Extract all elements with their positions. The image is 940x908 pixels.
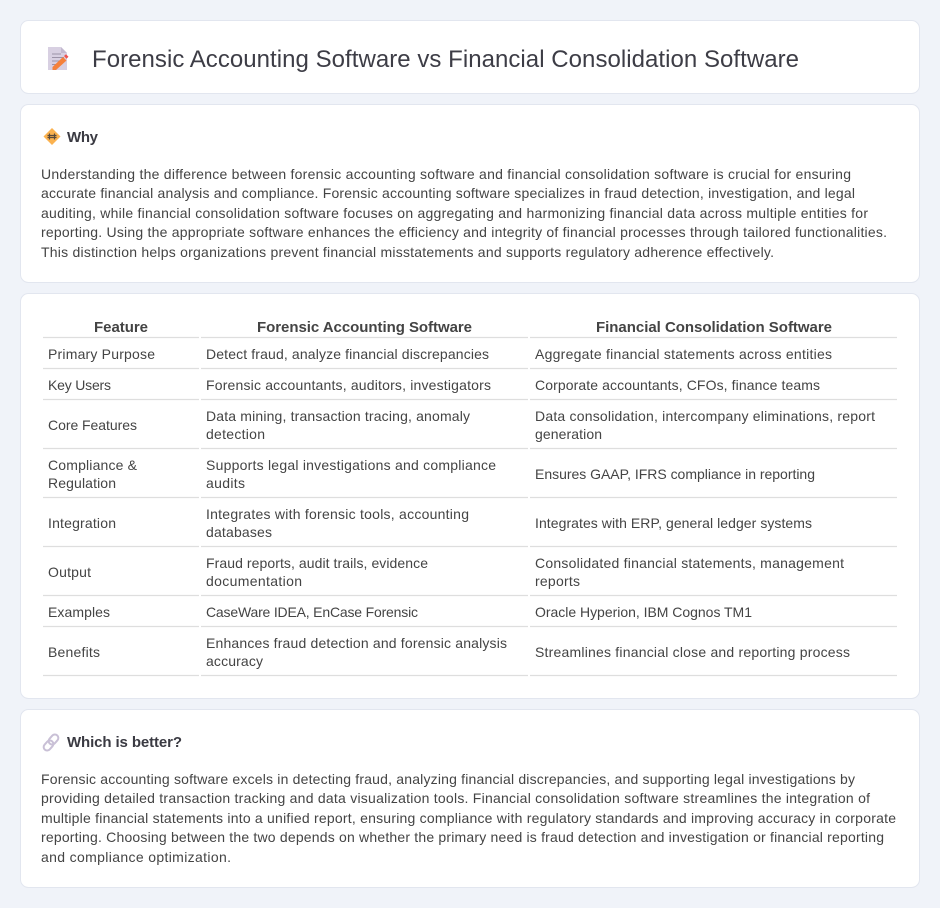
row: primary purpose: Primary Purpose [48, 346, 155, 362]
row: benefits [48, 635, 850, 669]
row: core features: Core Features [48, 417, 137, 433]
row: compliance and regulation [48, 457, 815, 491]
row: output: Output [48, 564, 91, 580]
row: primary purpose: Detect fraud, analyze financial discrepancies [206, 346, 489, 362]
row: examples: Examples [48, 604, 110, 620]
row: output: Fraud reports, audit trails, evidence [206, 555, 428, 571]
panel: comparison table [20, 294, 920, 698]
row: integration [48, 506, 812, 540]
title: Forensic Accounting Software vs Financial Consolidation Software [92, 46, 799, 73]
row: core features: generation [535, 426, 602, 442]
row: core features [48, 408, 875, 442]
table header [94, 319, 832, 336]
text block: which is better paragraph: multiple financial statements into a unified report, ensuring compliance with regulatory standards and improving accuracy in corporate [41, 810, 896, 826]
text block: which is better paragraph: Forensic accounting software excels in detecting fraud, analyzing financial discrepancies, and supporting legal investigations by [41, 771, 855, 787]
text block: why paragraph: accurate financial analysis and compliance. Forensic accounting software specializes in fraud detection, investigation, and legal [41, 185, 855, 201]
text block: why paragraph: This distinction helps organizations prevent financial misstatements and supports regulatory adherence effectively. [41, 244, 774, 260]
row: benefits: Benefits [48, 644, 100, 660]
table header: Feature [94, 319, 148, 336]
text block: which is better paragraph: providing detailed transaction tracking and data visualization tools. Financial consolidation software streamlines the integration of [41, 790, 870, 806]
table header: Forensic Accounting Software [257, 319, 472, 336]
row: benefits: Streamlines financial close and reporting process [535, 644, 850, 660]
row: integration: databases [206, 524, 272, 540]
panel: which is better [20, 710, 920, 888]
text block: why paragraph [41, 166, 887, 260]
row: primary purpose: Aggregate financial statements across entities [535, 346, 832, 362]
row: output: documentation [206, 573, 302, 589]
row: compliance and regulation: Ensures GAAP, IFRS compliance in reporting [535, 466, 815, 482]
row: core features: Data consolidation, intercompany eliminations, report [535, 408, 875, 424]
row: primary purpose [48, 346, 832, 362]
row: output [48, 555, 844, 589]
row: compliance and regulation: Regulation [48, 475, 116, 491]
row: compliance and regulation: Supports legal investigations and compliance [206, 457, 496, 473]
row: examples: CaseWare IDEA, EnCase Forensic [206, 604, 418, 620]
text block: why paragraph: reporting. Using the appropriate software enhances the efficiency and integrity of financial processes through tailored functionalities. [41, 224, 887, 240]
header panel [20, 20, 920, 94]
row: output: reports [535, 573, 580, 589]
icon: warning diamond [44, 128, 60, 145]
text block: which is better paragraph: and compliance optimization. [41, 849, 231, 865]
row: integration: Integration [48, 515, 116, 531]
icon: document with pencil [48, 47, 68, 70]
row: examples: Oracle Hyperion, IBM Cognos TM1 [535, 604, 752, 620]
table header: Financial Consolidation Software [596, 319, 832, 336]
text block: why paragraph: Understanding the difference between forensic accounting software and financial consolidation software is crucial for ensuring [41, 166, 851, 182]
panel: why [20, 104, 920, 282]
row: benefits: accuracy [206, 653, 263, 669]
row: examples [48, 604, 752, 620]
icon: link [42, 733, 60, 752]
row: benefits: Enhances fraud detection and forensic analysis [206, 635, 507, 651]
row: integration: Integrates with ERP, general ledger systems [535, 515, 812, 531]
row: integration: Integrates with forensic tools, accounting [206, 506, 469, 522]
row: output: Consolidated financial statements, management [535, 555, 844, 571]
row: core features: Data mining, transaction tracing, anomaly [206, 408, 470, 424]
row: compliance and regulation: Compliance & [48, 457, 138, 473]
heading: why: Why [67, 129, 99, 146]
row: key users: Key Users [48, 377, 111, 393]
row: compliance and regulation: audits [206, 475, 245, 491]
row: key users [48, 377, 820, 393]
text block: which is better paragraph: reporting. Choosing between the two depends on whether the primary need is fraud detection and investigation or financial reporting [41, 829, 884, 845]
text block: which is better paragraph [41, 771, 896, 865]
row: key users: Corporate accountants, CFOs, finance teams [535, 377, 820, 393]
text block: why paragraph: auditing, while financial consolidation software focuses on aggregating and harmonizing financial data across multiple entities for [41, 205, 868, 221]
row: core features: detection [206, 426, 265, 442]
row: key users: Forensic accountants, auditors, investigators [206, 377, 491, 393]
heading: which is better: Which is better? [67, 734, 182, 751]
